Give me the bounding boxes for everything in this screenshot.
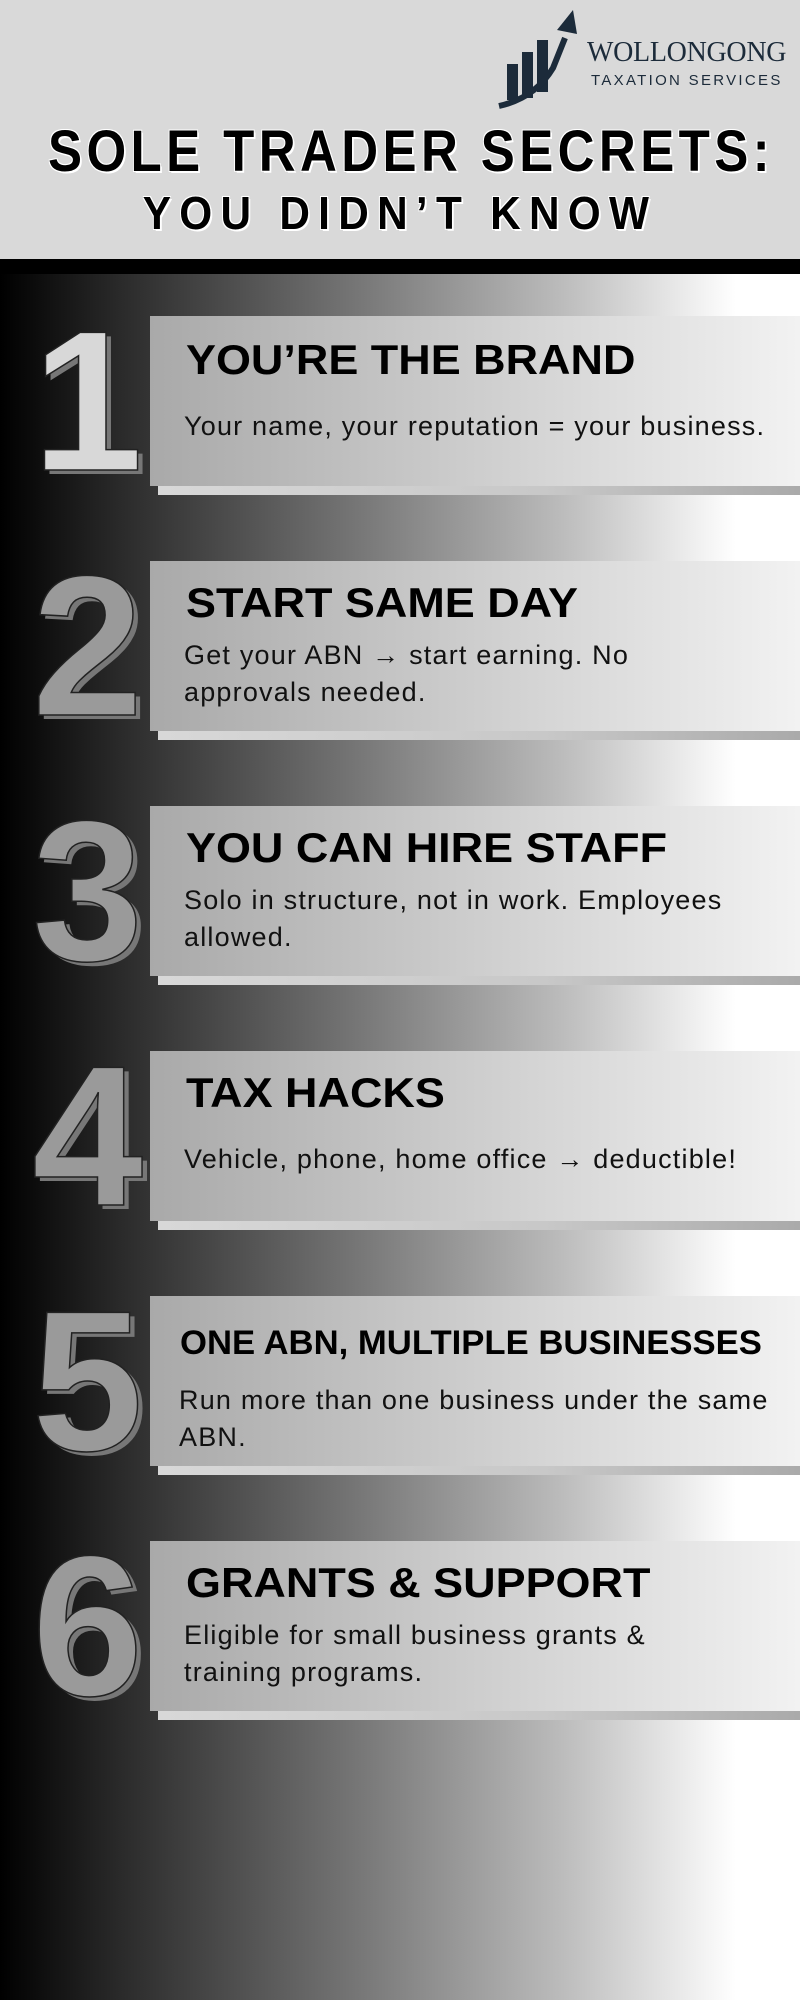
item 4: [32, 1025, 800, 1248]
card 5: Run more than one business under the same ABN.: [179, 1385, 769, 1452]
item 6: [32, 1515, 800, 1738]
card 3: Solo in structure, not in work. Employees allowed.: [184, 885, 722, 952]
logo: TAXATION SERVICES: [591, 72, 783, 89]
card 6: [150, 1541, 800, 1711]
logo: [498, 10, 786, 109]
card 4: [150, 1051, 800, 1221]
title: SOLE TRADER SECRETS:: [48, 119, 774, 184]
card 5: [150, 1296, 800, 1466]
number 1: 1: [32, 290, 143, 513]
subtitle: YOU DIDN’T KNOW: [143, 187, 657, 239]
number 3: 3: [32, 780, 143, 1003]
card 2: Get your ABN → start earning. No approvals needed.: [184, 640, 629, 707]
card 4: TAX HACKS: [186, 1069, 445, 1116]
header background: [0, 0, 800, 259]
card 3: YOU CAN HIRE STAFF: [186, 824, 667, 871]
card 6: GRANTS & SUPPORT: [186, 1559, 650, 1606]
card 6: Eligible for small business grants & training programs.: [184, 1620, 646, 1687]
card 5: ONE ABN, MULTIPLE BUSINESSES: [180, 1324, 762, 1362]
card 2: START SAME DAY: [186, 579, 578, 626]
card 2: [150, 561, 800, 731]
item 2: [32, 535, 800, 758]
card 1: Your name, your reputation = your business.: [184, 411, 765, 441]
icon: bar chart with arrow: [498, 10, 577, 109]
logo text: WOLLONGONG: [587, 37, 786, 68]
number 2: 2: [32, 535, 143, 758]
item 5: [32, 1270, 800, 1493]
card 4: Vehicle, phone, home office → deductible!: [184, 1144, 737, 1174]
card 1: YOU’RE THE BRAND: [186, 336, 635, 383]
number 6: 6: [32, 1515, 143, 1738]
item 3: [32, 780, 800, 1003]
item 1: [32, 290, 800, 513]
card 3: [150, 806, 800, 976]
card 1: [150, 316, 800, 486]
number 5: 5: [32, 1270, 143, 1493]
number 4: 4: [32, 1025, 143, 1248]
